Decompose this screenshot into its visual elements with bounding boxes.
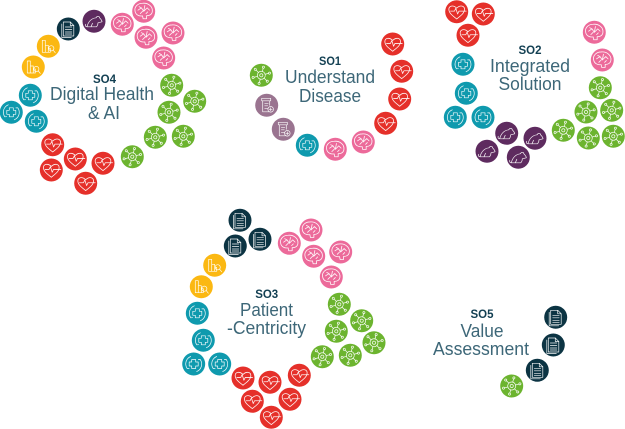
icon: brain	[583, 21, 606, 44]
icon: document	[248, 228, 272, 251]
icon: heart	[232, 366, 254, 390]
icon: heart	[92, 152, 114, 175]
icon: medical cross	[19, 84, 42, 107]
icon: heart	[381, 32, 404, 56]
icon: virus	[172, 125, 195, 148]
icon: document	[542, 334, 565, 356]
icon: mouse	[507, 146, 530, 169]
icon: brain	[111, 13, 134, 36]
icon: brain	[278, 232, 301, 255]
icon: virus	[602, 125, 625, 148]
icon: brain	[134, 26, 158, 49]
icon: prescription	[255, 94, 278, 117]
icon: heart	[288, 364, 311, 387]
SO5 heading: SO5	[470, 309, 494, 321]
icon: virus	[121, 145, 144, 168]
icon: virus	[552, 119, 575, 142]
icon: medical cross	[186, 302, 209, 325]
icon: chart	[190, 275, 213, 298]
icon: virus	[350, 309, 373, 332]
icon: heart	[260, 406, 283, 429]
icon: virus	[158, 101, 180, 124]
SO4 title second line: & AI	[88, 103, 120, 123]
icon: heart	[64, 148, 87, 170]
icon: document	[57, 18, 80, 40]
icon: document	[224, 234, 247, 258]
icon: medical cross	[192, 329, 215, 352]
icon: heart	[390, 60, 413, 83]
icon: medical cross	[182, 352, 205, 376]
icon: virus	[589, 76, 612, 99]
icon: chart	[203, 254, 226, 277]
icon: virus	[144, 126, 167, 149]
icon: heart	[472, 2, 495, 26]
SO1 title: Understand	[285, 67, 375, 87]
icon: virus	[339, 344, 362, 367]
icon: heart	[456, 24, 480, 47]
icon: brain	[329, 240, 352, 264]
SO2 title: Integrated	[490, 56, 570, 76]
icon: medical cross	[472, 106, 494, 129]
icon: brain	[152, 46, 175, 70]
icon: virus	[328, 293, 351, 316]
SO3 title: Patient	[240, 300, 293, 320]
icon: virus	[325, 320, 348, 343]
icon: heart	[445, 0, 468, 23]
icon: document	[228, 209, 252, 232]
icon: brain	[162, 22, 184, 44]
icon: virus	[500, 374, 523, 398]
ring: SO5 Value Assessment	[433, 306, 567, 398]
icon: brain	[352, 130, 375, 154]
icon: brain	[320, 266, 343, 288]
icon: medical cross	[455, 82, 478, 105]
icon: chart	[22, 56, 45, 78]
SO3 title second line: -Centricity	[227, 318, 306, 338]
SO2 title second line: Solution	[498, 74, 562, 94]
icon: heart	[40, 158, 63, 182]
icon: document	[544, 306, 567, 329]
SO4 heading: SO4	[93, 74, 117, 86]
SO4 title: Digital Health	[50, 84, 154, 104]
SO5 title: Value	[460, 321, 504, 341]
icon: heart	[74, 172, 97, 195]
icon: brain	[324, 138, 347, 161]
icon: document	[526, 359, 549, 382]
icon: heart	[41, 133, 64, 156]
icon: medical cross	[444, 106, 467, 129]
icon: heart	[388, 88, 411, 110]
icon: mouse	[82, 10, 106, 33]
icon: mouse	[476, 140, 498, 163]
icon: medical cross	[452, 53, 474, 76]
icon: brain	[300, 218, 322, 242]
SO5 title second line: Assessment	[433, 339, 529, 359]
ring: SO3 Patient-Centricity	[182, 209, 386, 429]
SO1 heading: SO1	[319, 56, 342, 68]
icon: chart	[37, 35, 60, 58]
SO1 title second line: Disease	[299, 86, 361, 106]
ring: SO4 Digital Health & AI	[0, 0, 206, 195]
ring: SO2 Integrated Solution	[444, 0, 625, 169]
icon: brain	[591, 48, 614, 72]
icon: mouse	[524, 127, 546, 150]
icon: brain	[132, 0, 155, 23]
icon: virus	[600, 99, 623, 122]
icon: medical cross	[0, 101, 23, 124]
icon: virus	[362, 331, 386, 354]
icon: virus	[183, 90, 206, 113]
icon: heart	[278, 388, 302, 411]
icon: virus	[574, 100, 598, 124]
icon: brain	[302, 245, 325, 268]
SO2 heading: SO2	[518, 45, 542, 57]
icon: virus	[250, 64, 273, 87]
icon: mouse	[495, 122, 518, 145]
icon: medical cross	[208, 352, 231, 376]
icon: virus	[577, 126, 600, 150]
icon: heart	[241, 390, 264, 413]
ring: SO1 Understand Disease	[250, 32, 413, 161]
icon: medical cross	[25, 110, 48, 133]
icon: virus	[160, 74, 183, 97]
SO3 heading: SO3	[255, 289, 278, 301]
icon: heart	[258, 371, 282, 394]
icon: prescription	[272, 118, 295, 141]
icon: virus	[311, 345, 334, 368]
icon: medical cross	[296, 134, 319, 157]
icon: heart	[374, 112, 397, 135]
